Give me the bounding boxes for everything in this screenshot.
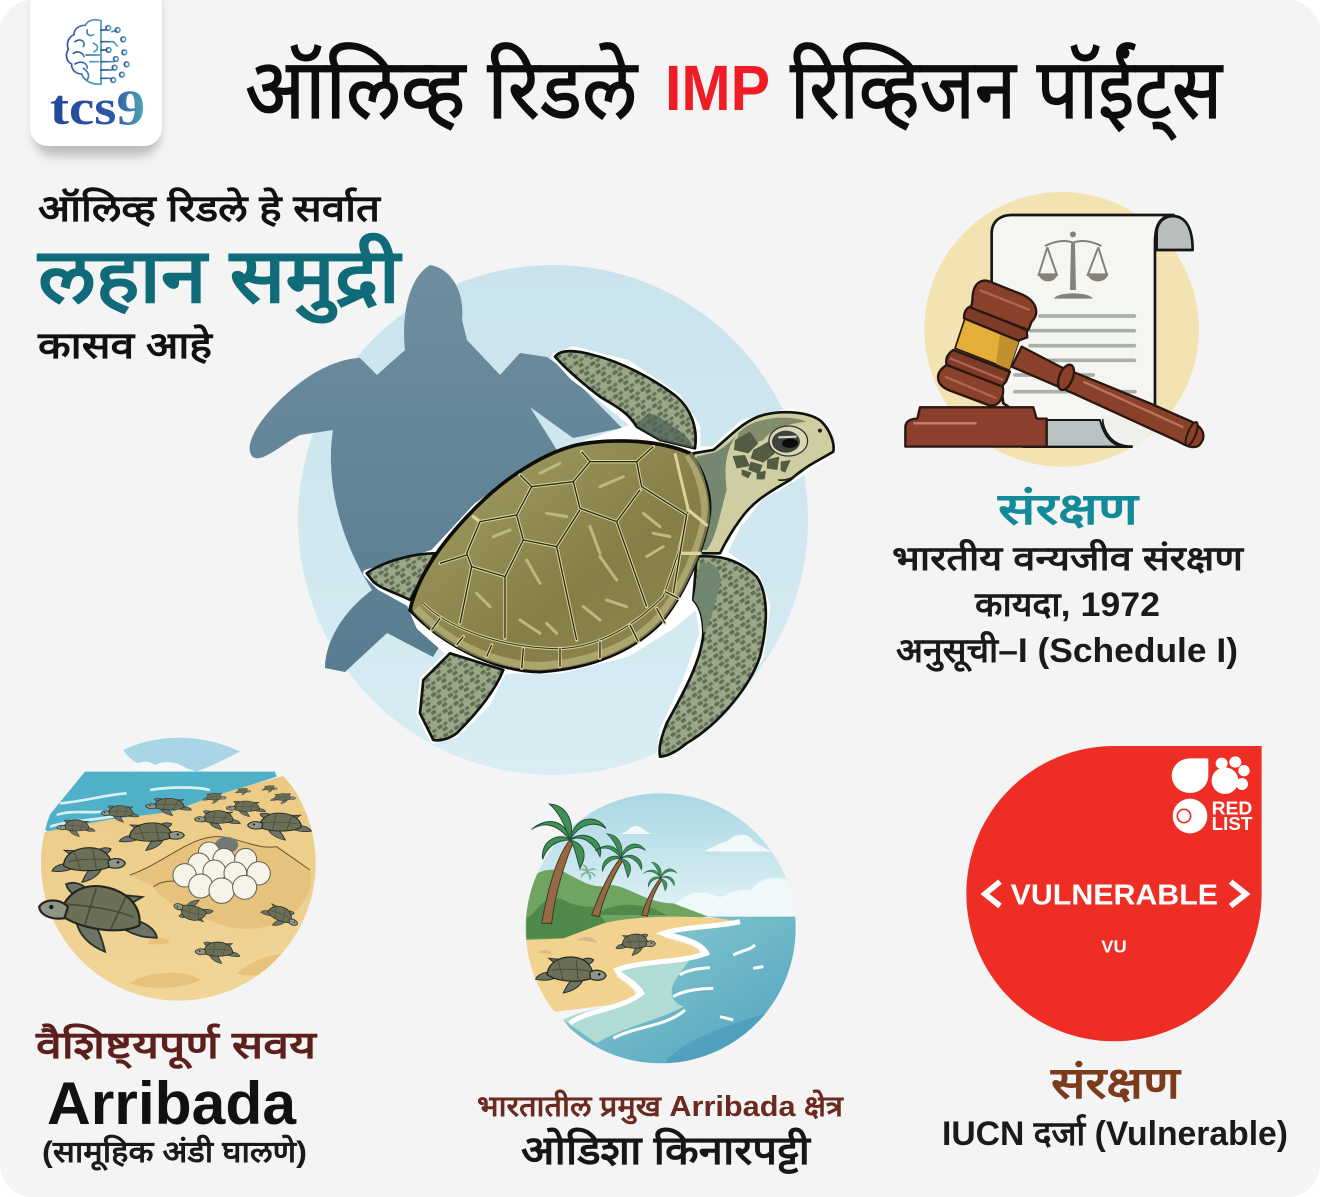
red list logo: LIST	[1212, 813, 1253, 834]
gavel handle	[1012, 347, 1203, 447]
right front flipper	[660, 556, 766, 757]
neck and head	[690, 412, 834, 553]
shell highlight rays	[477, 463, 670, 633]
egg nest	[130, 837, 311, 929]
VU code: VU	[1101, 936, 1127, 956]
illustration: olive ridley turtle with shadow	[250, 265, 834, 775]
sand	[41, 776, 316, 1001]
cream circle	[924, 192, 1199, 467]
arribada turtles	[34, 786, 311, 963]
protection text block: संरक्षण	[997, 485, 1141, 534]
title: ऑलिव्ह रिडले	[245, 42, 638, 136]
eye	[769, 426, 808, 456]
gavel head	[938, 281, 1036, 406]
arribada text block: (सामूहिक अंडी घालणे)	[42, 1134, 307, 1171]
shell scutes	[432, 447, 707, 668]
arribada text block	[35, 1023, 318, 1171]
palm trees	[532, 804, 677, 923]
logo wordmark: tcs9	[50, 79, 145, 135]
red list logo	[1172, 756, 1253, 834]
icon: circuit brain	[66, 20, 129, 84]
lower rear flipper	[420, 653, 503, 740]
gavel base	[905, 407, 1047, 447]
protection text block: भारतीय वन्यजीव संरक्षण	[892, 538, 1245, 578]
coast text block	[477, 1089, 844, 1174]
rear left flipper	[367, 553, 435, 600]
carapace shell	[410, 441, 710, 672]
protection text block: कायदा, 1972	[974, 586, 1160, 624]
IUCN text block: IUCN दर्जा (Vulnerable)	[942, 1113, 1288, 1153]
title: IMP	[665, 52, 770, 124]
vulnerable label: VULNERABLE	[1011, 880, 1218, 912]
arribada text block: Arribada	[47, 1070, 297, 1137]
protection text block	[892, 485, 1245, 673]
title: रिव्हिजन पॉईंट्स	[790, 42, 1223, 141]
shell marginal ring	[416, 455, 705, 666]
intro text block: smallest sea turtle: ऑलिव्ह रिडले हे सर्वात	[38, 187, 382, 229]
IUCN text block: संरक्षण	[1050, 1059, 1183, 1108]
clouds	[620, 826, 800, 917]
turtle white halo	[367, 350, 833, 757]
document text lines	[1015, 316, 1135, 392]
coast text block: ओडिशा किनारपट्टी	[521, 1127, 812, 1174]
red list logo: RED	[1212, 798, 1252, 819]
logo card: tcs9	[30, 0, 162, 156]
sea	[40, 772, 277, 832]
top front flipper	[555, 351, 696, 448]
intro text block: smallest sea turtle	[36, 187, 403, 366]
sky patch	[123, 738, 240, 772]
sea	[563, 917, 797, 1067]
intro text block: smallest sea turtle: कासव आहे	[37, 324, 214, 366]
protection text block: अनुसूची–I (Schedule I)	[896, 630, 1238, 673]
arribada text block: वैशिष्ट्यपूर्ण सवय	[35, 1023, 318, 1070]
head scales	[733, 432, 791, 479]
hills	[520, 870, 708, 940]
illustration: odisha coast beach	[520, 790, 807, 1067]
illustration: arribada nesting beach	[30, 738, 330, 1007]
sky	[532, 793, 789, 918]
intro text block: smallest sea turtle: लहान समुद्री	[36, 232, 403, 324]
coast text block: भारतातील प्रमुख Arribada क्षेत्र	[477, 1089, 844, 1125]
IUCN text block	[942, 1059, 1288, 1153]
legal scroll	[992, 215, 1193, 447]
scales of justice icon	[1038, 231, 1108, 299]
IUCN red list vulnerable badge	[966, 746, 1262, 1041]
beach turtles	[535, 934, 655, 996]
illustration: gavel and law document	[905, 192, 1203, 467]
title	[245, 42, 1223, 141]
sand	[520, 917, 733, 1012]
